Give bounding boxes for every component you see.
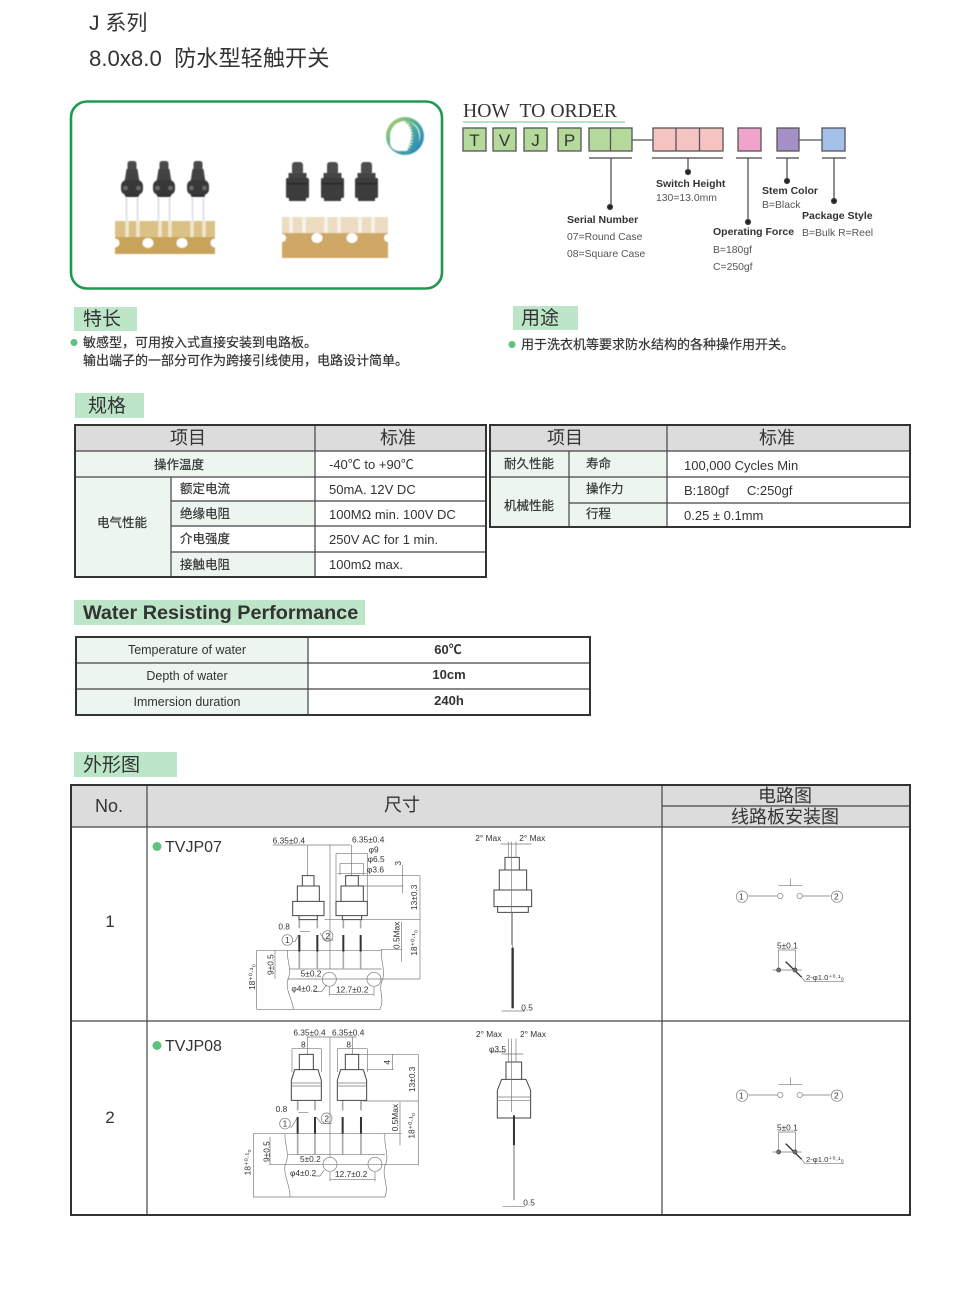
label: TVJP08: TVJP08 <box>165 1038 222 1055</box>
label: stem color: B=Black <box>762 200 801 211</box>
table: right specifications: 100,000 Cycles Min <box>684 458 798 473</box>
drawing: TVJP08 dimensions: 2° Max <box>476 1029 503 1039</box>
drawing: TVJP07 dimensions: 9±0.5 <box>265 954 275 975</box>
table: outline drawings <box>71 785 910 1215</box>
drawing: TVJP07 dimensions: 3 <box>393 861 403 866</box>
table: left specifications: 50mA. 12V DC <box>329 482 416 497</box>
drawing: TVJP07 dimensions: φ9 <box>369 844 379 854</box>
drawing: TVJP07 dimensions: 13±0.3 <box>409 884 419 910</box>
drawing: TVJP07 dimensions: 6.35±0.4 <box>352 834 385 844</box>
label: switch height: 130=13.0mm <box>656 193 717 204</box>
diagram: TVJP08 circuit: 1 <box>739 1091 744 1101</box>
heading: features <box>74 307 137 331</box>
drawing: TVJP07 dimensions: 2° Max <box>519 833 546 843</box>
heading: outline drawings: 外形图 <box>83 754 140 776</box>
heading: specifications <box>75 393 144 418</box>
heading: outline drawings <box>74 752 177 777</box>
table: outline drawings: No. <box>95 796 123 816</box>
diagram: TVJP08 circuit <box>736 1077 843 1101</box>
table: outline drawings: 2 <box>105 1108 115 1127</box>
icon: waterproof drop logo <box>386 117 424 155</box>
label: operating force: B=180gf <box>713 245 752 256</box>
label: serial number <box>567 214 645 260</box>
diagram: TVJP07 circuit: 1 <box>739 892 744 902</box>
drawing: TVJP08 dimensions: 8 <box>346 1040 351 1050</box>
text: feature list: 输出端子的一部分可作为跨接引线使用，电路设计简单。 <box>83 353 408 368</box>
diagram: TVJP08 mounting holes: 5±0.1 <box>777 1122 798 1132</box>
photo: round case switches on tape <box>110 161 220 254</box>
table: water resisting performance: Immersion duration <box>134 695 241 709</box>
table: right specifications: 行程 <box>586 506 612 521</box>
table: left specifications: 电气性能 <box>97 515 147 530</box>
text: feature list: 敏感型，可用按入式直接安装到电路板。 <box>83 335 317 350</box>
drawing: TVJP08 dimensions: 18⁺⁰·¹₀ <box>406 1113 416 1139</box>
table: right specifications: 项目 <box>547 428 583 448</box>
panel: product photo <box>71 102 442 288</box>
drawing: TVJP08 dimensions: 0.5Max <box>390 1103 400 1131</box>
code letters: P <box>564 131 575 150</box>
table: left specifications: 绝缘电阻 <box>180 506 231 521</box>
label: operating force <box>713 226 794 273</box>
drawing: TVJP08 dimensions: 4 <box>382 1060 392 1065</box>
title: product name: 8.0x8.0 防水型轻触开关 <box>89 46 329 71</box>
drawing: TVJP07 dimensions: φ4±0.2 <box>291 984 318 994</box>
drawing: TVJP08 dimensions: 13±0.3 <box>407 1066 417 1092</box>
diagram: TVJP07 circuit: 2 <box>834 892 839 902</box>
code letters: T <box>469 131 480 150</box>
label: stem color <box>762 185 818 211</box>
table: water resisting performance <box>76 637 590 715</box>
table: outline drawings: 尺寸 <box>384 795 420 815</box>
drawing: TVJP07 dimensions: 6.35±0.4 <box>273 835 305 845</box>
drawing: TVJP07 dimensions: 0.8 <box>278 921 290 931</box>
drawing: TVJP08 dimensions <box>243 1027 547 1207</box>
table: outline drawings: 线路板安装图 <box>731 807 839 827</box>
drawing: TVJP07 dimensions: φ3.6 <box>367 864 384 874</box>
drawing: TVJP07 dimensions: 2° Max <box>475 833 502 843</box>
label: operating force: Operating Force <box>713 226 794 238</box>
table: right specifications: 机械性能 <box>504 498 554 513</box>
table: outline drawings: 电路图 <box>758 786 812 806</box>
drawing: TVJP07 dimensions: 18⁺⁰·¹₀ <box>409 930 419 956</box>
drawing: TVJP08 dimensions: 6.35±0.4 <box>293 1027 326 1037</box>
label: TVJP07: TVJP07 <box>165 839 222 856</box>
heading: applications: 用途 <box>521 307 559 329</box>
drawing: TVJP08 dimensions: 1 <box>283 1119 288 1129</box>
panel: applications <box>508 306 794 352</box>
table: water resisting performance: 60℃ <box>434 642 462 657</box>
drawing: TVJP08 dimensions: 9±0.5 <box>261 1141 271 1162</box>
table: water resisting performance: Depth of water <box>146 669 228 683</box>
drawing: TVJP07 dimensions: φ6.5 <box>368 854 385 864</box>
drawing: TVJP07 dimensions: 5±0.2 <box>301 969 322 979</box>
diagram: TVJP07 circuit <box>736 878 843 902</box>
label: serial number: 08=Square Case <box>567 249 645 260</box>
label: package style: B=Bulk R=Reel <box>802 228 873 239</box>
text: applications: 用于洗衣机等要求防水结构的各种操作用开关。 <box>521 337 794 352</box>
table: right specifications: B:180gf C:250gf <box>684 483 793 498</box>
panel: how to order <box>463 100 873 273</box>
heading: how to order: HOW TO ORDER <box>463 100 618 122</box>
table: left specifications: 100MΩ min. 100V DC <box>329 507 456 522</box>
drawing: TVJP08 dimensions: 2 <box>324 1113 329 1123</box>
drawing: TVJP08 dimensions: 5±0.2 <box>300 1154 321 1164</box>
table: left specifications: 项目 <box>170 428 206 448</box>
table: left specifications: 接触电阻 <box>180 557 231 572</box>
drawing: TVJP08 dimensions: φ4±0.2 <box>290 1168 317 1178</box>
table: left specifications: -40℃ to +90℃ <box>329 457 414 472</box>
drawing: TVJP08 dimensions: 8 <box>301 1040 306 1050</box>
diagram: TVJP08 circuit: 2 <box>834 1091 839 1101</box>
drawing: TVJP07 dimensions: 2 <box>325 931 330 941</box>
diagram: TVJP08 mounting holes: 2-φ1.0⁺⁰·¹₀ <box>806 1155 844 1164</box>
code letters <box>469 131 575 150</box>
panel: features <box>70 307 408 368</box>
table: right specifications: 寿命 <box>586 456 612 471</box>
table: left specifications: 额定电流 <box>180 481 231 496</box>
code letters: J <box>531 131 540 150</box>
diagram: TVJP07 mounting holes <box>773 940 844 982</box>
label: stem color: Stem Color <box>762 185 818 197</box>
table: right specifications: 耐久性能 <box>504 457 554 471</box>
drawing: TVJP08 dimensions: 0.8 <box>276 1104 288 1114</box>
table: left specifications: 100mΩ max. <box>329 557 403 572</box>
table: left specifications: 操作温度 <box>154 457 204 472</box>
table: right specifications <box>490 425 910 527</box>
drawing: TVJP08 dimensions: 18⁺⁰·¹₀ <box>243 1149 253 1175</box>
table: left specifications: 介电强度 <box>180 531 231 546</box>
label: switch height: Switch Height <box>656 178 726 190</box>
table: right specifications: 标准 <box>759 428 795 448</box>
diagram: TVJP07 mounting holes: 2-φ1.0⁺⁰·¹₀ <box>806 973 844 982</box>
table: outline drawings: 1 <box>105 912 115 931</box>
table: water resisting performance: 10cm <box>432 667 466 682</box>
table: left specifications: 250V AC for 1 min. <box>329 532 438 547</box>
text: feature list <box>70 335 408 368</box>
code letters: V <box>499 131 511 150</box>
table: right specifications: 0.25 ± 0.1mm <box>684 508 763 523</box>
leader lines <box>589 158 846 224</box>
drawing: TVJP07 dimensions: 1 <box>285 935 290 945</box>
title: series: J 系列 <box>89 12 147 35</box>
drawing: TVJP08 dimensions: 6.35±0.4 <box>332 1027 365 1037</box>
table: right specifications: 操作力 <box>586 481 624 496</box>
label: serial number: 07=Round Case <box>567 232 643 243</box>
drawing: TVJP08 dimensions: 0.5 <box>523 1197 535 1207</box>
heading: specifications: 规格 <box>88 395 126 417</box>
table: water resisting performance: Temperature of water <box>128 643 246 657</box>
photo: square case switches on tape <box>278 162 392 258</box>
diagram: TVJP08 mounting holes <box>773 1122 844 1164</box>
table: water resisting performance: 240h <box>434 693 464 708</box>
heading: applications <box>513 306 578 330</box>
drawing: TVJP07 dimensions: 12.7±0.2 <box>336 984 369 994</box>
drawing: TVJP07 dimensions: 0.5 <box>521 1002 533 1012</box>
table: left specifications: 标准 <box>380 428 416 448</box>
label: package style <box>802 210 873 239</box>
label: switch height <box>656 178 726 204</box>
code boxes <box>463 128 845 151</box>
drawing: TVJP07 dimensions <box>247 833 546 1012</box>
label: operating force: C=250gf <box>713 262 753 273</box>
drawing: TVJP08 dimensions: 2° Max <box>520 1029 547 1039</box>
label: serial number: Serial Number <box>567 214 638 226</box>
drawing: TVJP08 dimensions: 12.7±0.2 <box>335 1169 368 1179</box>
drawing: TVJP07 dimensions: 18⁺⁰·¹₀ <box>247 964 257 990</box>
drawing: TVJP08 dimensions: φ3.5 <box>489 1044 506 1054</box>
label: package style: Package Style <box>802 210 873 222</box>
drawing: TVJP07 dimensions: 0.5Max <box>392 921 402 949</box>
diagram: TVJP07 mounting holes: 5±0.1 <box>777 940 798 950</box>
heading: features: 特长 <box>83 308 121 330</box>
table: left specifications <box>75 425 486 577</box>
heading: water resisting performance: Water Resisting Performance <box>83 602 358 624</box>
